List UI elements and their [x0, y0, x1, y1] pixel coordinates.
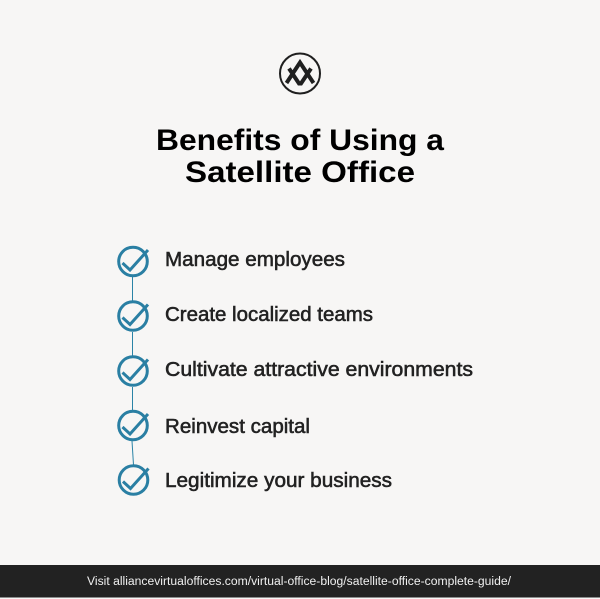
benefit: Create localized teams: Create localized teams	[165, 304, 373, 326]
benefit: Reinvest capital: Reinvest capital	[165, 416, 310, 438]
benefit: Legitimize your business: Legitimize your business	[165, 470, 392, 492]
benefit: Manage employees: Manage employees	[165, 249, 345, 271]
title: Satellite Office	[185, 156, 415, 189]
icon: check circle	[119, 247, 148, 276]
benefit: Manage employees	[119, 247, 345, 276]
connector lines	[132, 277, 134, 465]
icon: check circle	[119, 466, 148, 494]
title: Benefits of Using a	[156, 124, 444, 157]
icon: check circle	[119, 411, 148, 440]
icon: check circle	[119, 357, 148, 385]
logo	[280, 54, 320, 94]
title	[156, 124, 444, 189]
icon: check circle	[119, 302, 148, 330]
benefit: Create localized teams	[119, 302, 373, 330]
benefit: Cultivate attractive environments	[119, 357, 473, 385]
footer bar: Visit alliancevirtualoffices.com/virtual-office-blog/satellite-office-complete-guide/	[87, 576, 512, 588]
benefit: Legitimize your business	[119, 466, 392, 494]
footer bar	[0, 565, 600, 598]
benefit: Reinvest capital	[119, 411, 310, 440]
benefit: Cultivate attractive environments: Cultivate attractive environments	[165, 359, 473, 381]
